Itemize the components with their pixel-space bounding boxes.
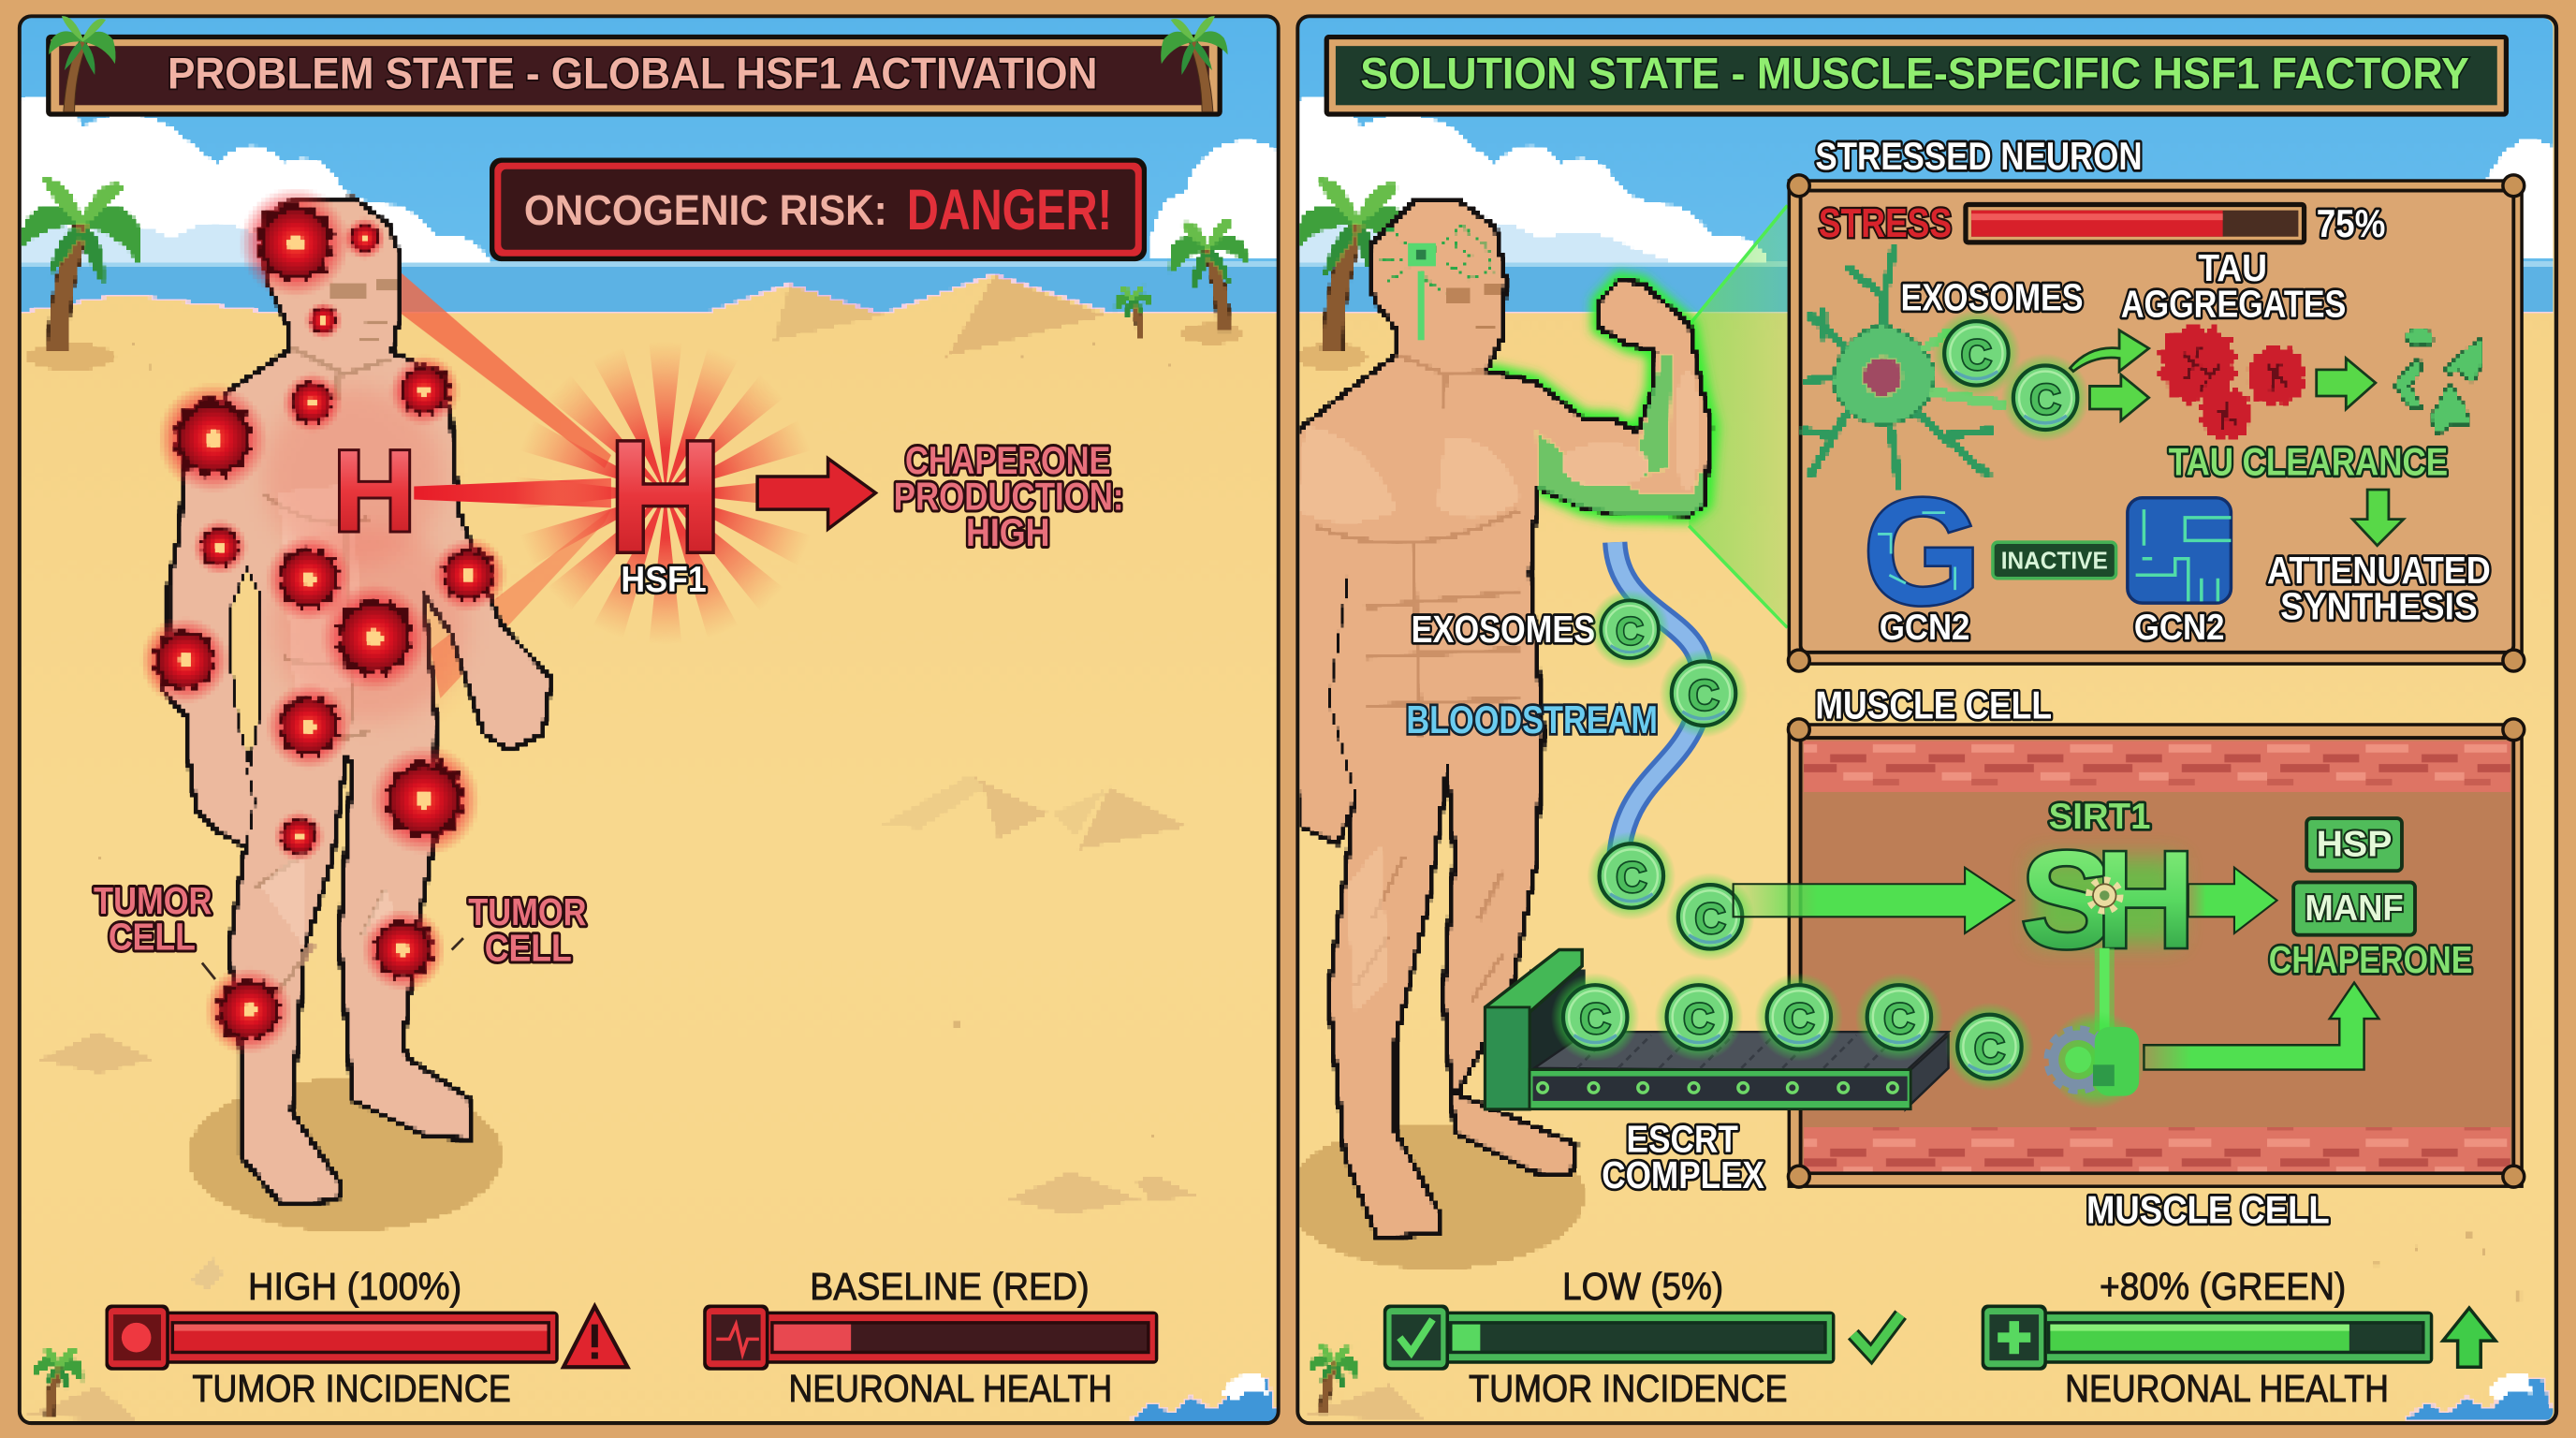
banner: problem title: PROBLEM STATE - GLOBAL HSF1 ACTIVATION [168, 49, 1097, 98]
tau aggregates label [2121, 246, 2346, 326]
elbow arrow to chaperone [2144, 983, 2378, 1070]
icon: check badge [1383, 1305, 1449, 1371]
exosome coins on conveyor: C [1974, 1024, 2005, 1072]
muscle green highlight [1536, 353, 1704, 514]
icon: palm trees left [22, 179, 1248, 1416]
SIRT1 HSF1 complex [2021, 824, 2195, 977]
panel: stressed neuron [1788, 134, 2525, 671]
icon: heartbeat badge [703, 1305, 768, 1371]
SIRT1 HSF1 complex: S [2021, 824, 2113, 977]
panel: muscle cell [1734, 682, 2525, 1231]
muscular human figure [1292, 200, 1710, 1238]
meter: tumor incidence low: TUMOR INCIDENCE [1469, 1367, 1788, 1410]
meter: neuronal health plus: NEURONAL HEALTH [2065, 1367, 2389, 1410]
inactive tag: INACTIVE [2001, 546, 2108, 574]
small H in body: H [333, 427, 417, 555]
panel: muscle cell: SIRT1 [2049, 797, 2150, 837]
HSP box [2306, 818, 2402, 871]
chaperone production label: CHAPERONE [905, 438, 1110, 482]
exosome coins in bloodstream: C [1689, 671, 1720, 719]
meter: neuronal health plus: +80% (GREEN) [2100, 1265, 2346, 1308]
tau aggregates label: AGGREGATES [2121, 283, 2346, 326]
tumor cells [141, 188, 505, 1054]
attenuated synthesis [2267, 549, 2491, 628]
meter: tumor incidence low [1383, 1265, 1901, 1410]
icon: palm trees right [1296, 179, 1415, 1413]
desert scene right [1296, 18, 2563, 1423]
exosome coins on conveyor: C [1683, 995, 1714, 1043]
sand specks [98, 340, 1171, 1138]
ESCRT complex label: COMPLEX [1602, 1153, 1764, 1196]
arm gap [230, 568, 261, 766]
exosome coins in bloodstream: C [1616, 609, 1644, 653]
check mark highlight [1853, 1314, 1901, 1354]
meter: tumor incidence high [105, 1265, 627, 1410]
connector line [2095, 948, 2115, 1030]
arrow to clearance [2317, 359, 2376, 409]
icon: banner palms [49, 16, 1228, 111]
brain neuron soma [1408, 243, 1436, 340]
MANF box [2293, 882, 2415, 935]
panel: problem state [20, 16, 1281, 1423]
exosome coins on conveyor [1551, 973, 2034, 1091]
rays [514, 342, 816, 644]
panel: solution state [1288, 17, 2563, 1423]
GCN2 letter G: GCN2 [1880, 608, 1969, 648]
chaperone production label [894, 438, 1123, 554]
exosomes bloodstream label: EXOSOMES [1412, 608, 1595, 651]
ESCRT complex label: ESCRT [1627, 1117, 1738, 1160]
GCN2 circuit chip: GCN2 [2134, 608, 2224, 648]
GCN2 circuit chip [2128, 498, 2231, 648]
attenuated synthesis: SYNTHESIS [2280, 585, 2478, 628]
exosome coins on conveyor: C [1783, 995, 1814, 1043]
stress meter [1819, 200, 2385, 246]
ground shadow [1288, 1123, 1584, 1269]
icon: plus badge [1982, 1305, 2047, 1371]
stress meter: 75% [2317, 201, 2385, 245]
attenuated synthesis: ATTENUATED [2267, 549, 2491, 592]
icon: gear [2089, 881, 2119, 910]
ESCRT conveyor [1486, 949, 1949, 1109]
arm to neuron zoom wedge [1689, 202, 1791, 627]
panel: stressed neuron: TAU CLEARANCE [2169, 440, 2448, 484]
banner: problem title [46, 35, 1222, 117]
cleared tau fragments [2395, 329, 2481, 433]
meter: neuronal health baseline [703, 1265, 1158, 1410]
tumor cell label left: CELL [109, 915, 196, 958]
exosome coins neuron: C [1961, 331, 1992, 379]
HSF1 burst: H [608, 408, 723, 585]
HSP box: HSP [2317, 825, 2392, 865]
panel: muscle cell: MUSCLE CELL [1815, 682, 2052, 726]
bloodstream vessel [1615, 542, 1702, 871]
stress meter: STRESS [1819, 200, 1952, 246]
brain neuron circuit [1380, 227, 1492, 342]
panel: muscle cell: CHAPERONE [2269, 938, 2472, 981]
ground shadow [189, 1079, 501, 1231]
callout: oncogenic risk: DANGER! [907, 178, 1112, 242]
meter: neuronal health baseline: NEURONAL HEALTH [788, 1367, 1112, 1410]
tumor cell label left [94, 879, 215, 979]
exosome coins in bloodstream: C [1695, 895, 1726, 943]
GCN2 letter G: G [1864, 468, 1981, 637]
icon: up arrow [2443, 1308, 2496, 1367]
box frame [1788, 175, 2525, 671]
panel: stressed neuron: STRESSED NEURON [1815, 134, 2143, 178]
tumor cell label right: TUMOR [468, 890, 587, 933]
meter: tumor incidence low: LOW (5%) [1562, 1265, 1723, 1308]
exosome coins on conveyor: C [1883, 995, 1914, 1043]
meter: neuronal health baseline: BASELINE (RED) [810, 1265, 1090, 1308]
box frame [1788, 719, 2525, 1188]
arrow exosome to SIRT1 [1734, 868, 2014, 933]
banner: solution title [1325, 35, 2509, 117]
exosome coins on conveyor: C [1580, 995, 1611, 1043]
meter: tumor incidence high: HIGH (100%) [248, 1265, 461, 1308]
icon: warning triangle [564, 1306, 627, 1367]
exosome coins neuron [1932, 309, 2089, 442]
HSF1 burst: HSF1 [621, 560, 707, 600]
exosome coins in bloodstream [1587, 590, 1754, 961]
down arrow [2352, 490, 2404, 546]
panel: stressed neuron: EXOSOMES [1901, 276, 2083, 319]
arrow to chaperone [757, 459, 875, 529]
tumor cell label right [452, 890, 587, 970]
HSF1 burst [514, 342, 816, 644]
chaperone production label: HIGH [966, 510, 1050, 554]
meter: tumor incidence high: TUMOR INCIDENCE [192, 1367, 511, 1410]
desert scene left [22, 18, 1281, 1421]
tau aggregates label: TAU [2198, 246, 2267, 289]
exosome coins in bloodstream: C [1616, 854, 1647, 902]
green arrows to tau [2070, 330, 2149, 420]
neuron cell [1804, 246, 2001, 487]
chaperone production label: PRODUCTION: [894, 475, 1123, 519]
callout: oncogenic risk: ONCOGENIC RISK: [524, 186, 887, 234]
icon: tumor badge [105, 1305, 169, 1371]
meter: neuronal health plus [1982, 1265, 2496, 1410]
icon: check mark [1853, 1314, 1901, 1354]
exosomes bloodstream label [1406, 608, 1658, 741]
panel: muscle cell: MUSCLE CELL [2086, 1187, 2330, 1231]
exosomes bloodstream label: BLOODSTREAM [1406, 697, 1658, 741]
exosome coins neuron: C [2030, 375, 2061, 423]
SIRT1 HSF1 complex: H [2096, 824, 2195, 977]
beams from body to HSF1 [399, 271, 611, 698]
ESCRT complex label [1602, 1117, 1764, 1196]
MANF box: MANF [2305, 888, 2404, 929]
banner: solution title: SOLUTION STATE - MUSCLE-SPECIFIC HSF1 FACTORY [1360, 49, 2469, 98]
machinery gear [2047, 1010, 2145, 1109]
small H in body [333, 427, 611, 555]
human figure with tumors [141, 188, 550, 1204]
tumor cell label left: TUMOR [94, 879, 212, 922]
arrow to chaperones [2188, 868, 2277, 933]
arm glow [1486, 281, 1710, 514]
tau aggregates [2159, 326, 2306, 440]
callout: oncogenic risk [490, 157, 1147, 261]
tumor cell label right: CELL [485, 927, 572, 970]
